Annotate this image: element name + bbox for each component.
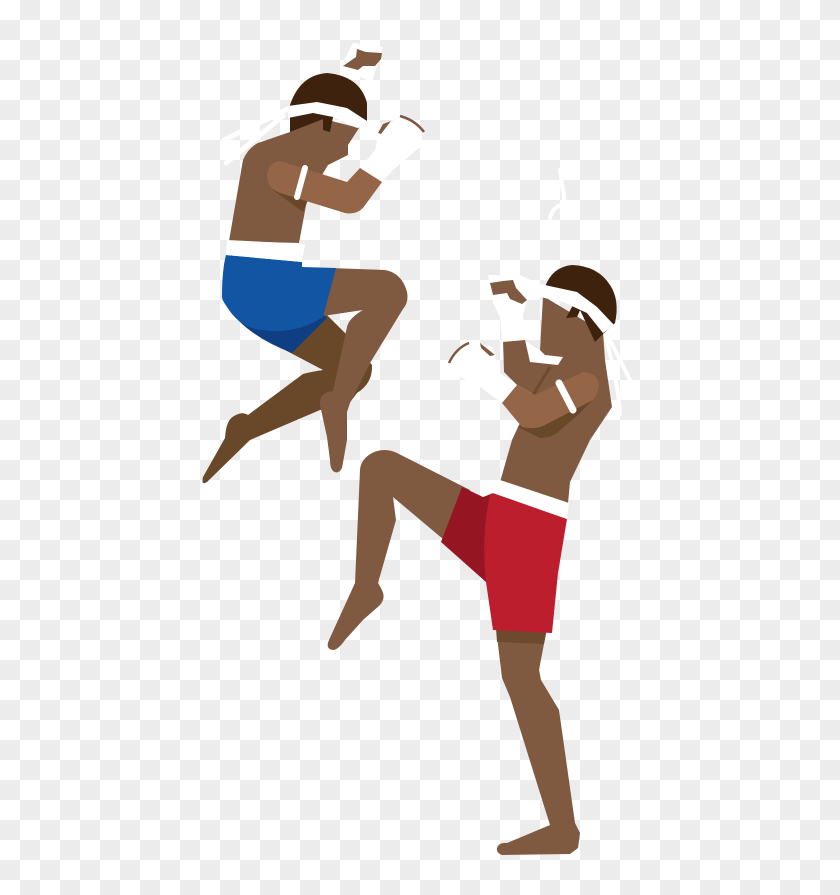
red fighter headband (540, 284, 614, 333)
red fighter hair (545, 265, 617, 342)
red fighter lower glove (448, 341, 517, 403)
blue fighter back leg (202, 310, 372, 483)
blue fighter torso and head (229, 118, 359, 243)
blue fighter forearm (267, 161, 382, 213)
blue fighter shorts (222, 255, 336, 353)
red fighter headband tails (550, 170, 630, 414)
blue fighter headband tails (224, 108, 290, 163)
red fighter standing leg (496, 628, 580, 855)
blue fighter hair (290, 73, 367, 132)
blue fighter glove (360, 116, 424, 182)
red fighter forearm shadow (518, 400, 593, 438)
red fighter neck gap (525, 340, 563, 365)
red fighter armband (559, 383, 573, 410)
red fighter torso and head (500, 296, 612, 503)
blue fighter waistband (226, 240, 305, 262)
blue fighter arm shadow (273, 180, 310, 212)
blue fighter front leg (320, 268, 408, 472)
blue fighter headband (288, 102, 367, 128)
red fighter waistband (480, 480, 569, 519)
red fighter upper glove and fist (488, 275, 541, 342)
red fighter forearm (502, 372, 599, 428)
red fighter raised leg (328, 450, 470, 650)
fighter: red shorts, kneeing (328, 170, 630, 855)
blue fighter top fist and wrap (340, 43, 383, 82)
red fighter back arm fold (533, 367, 550, 395)
blue fighter armband (297, 168, 305, 197)
fighter: blue shorts, jumping (202, 43, 424, 483)
red fighter shorts (441, 487, 567, 633)
